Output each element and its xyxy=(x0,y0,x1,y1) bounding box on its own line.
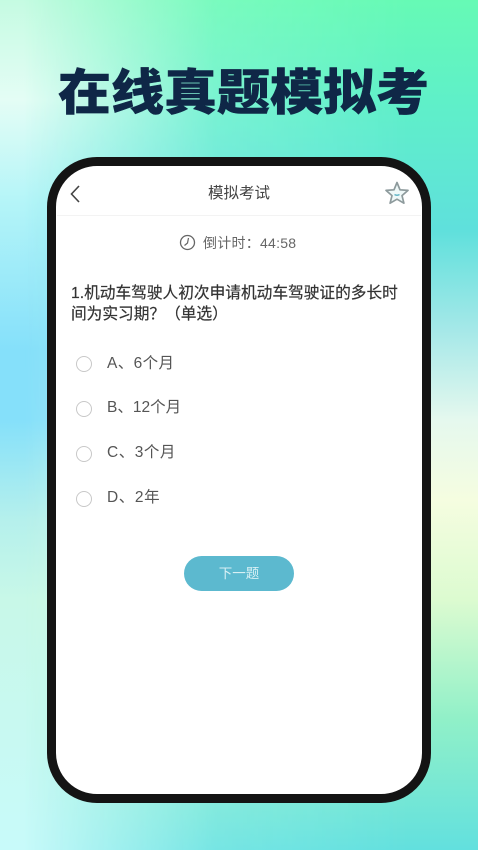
option C xyxy=(76,444,176,462)
next question button xyxy=(184,556,294,591)
question text: 间为实习期？（单选） xyxy=(71,306,228,323)
icon: clock xyxy=(180,234,196,250)
option D xyxy=(76,488,160,507)
radio D xyxy=(76,491,92,507)
icon: favourite star xyxy=(385,182,409,204)
title: 在线真题模拟考 xyxy=(58,66,429,121)
question text xyxy=(71,284,398,323)
countdown timer xyxy=(180,234,296,250)
next question button: 下一题 xyxy=(219,566,259,581)
countdown text: 倒计时：44:58 xyxy=(203,234,296,250)
radio A xyxy=(76,356,92,372)
radio B xyxy=(76,401,92,417)
panel: phone frame xyxy=(47,157,431,803)
back arrow icon xyxy=(70,186,80,202)
option B xyxy=(76,399,181,417)
option A xyxy=(76,355,174,372)
screen title: 模拟考试 xyxy=(208,184,270,202)
label C: C、3个月 xyxy=(107,444,176,461)
label D: D、2年 xyxy=(107,489,160,506)
label B: B、12个月 xyxy=(107,399,181,416)
radio C xyxy=(76,446,92,462)
header divider xyxy=(57,215,421,216)
question text: 1.机动车驾驶人初次申请机动车驾驶证的多长时 xyxy=(71,285,398,302)
label A: A、6个月 xyxy=(107,355,174,372)
